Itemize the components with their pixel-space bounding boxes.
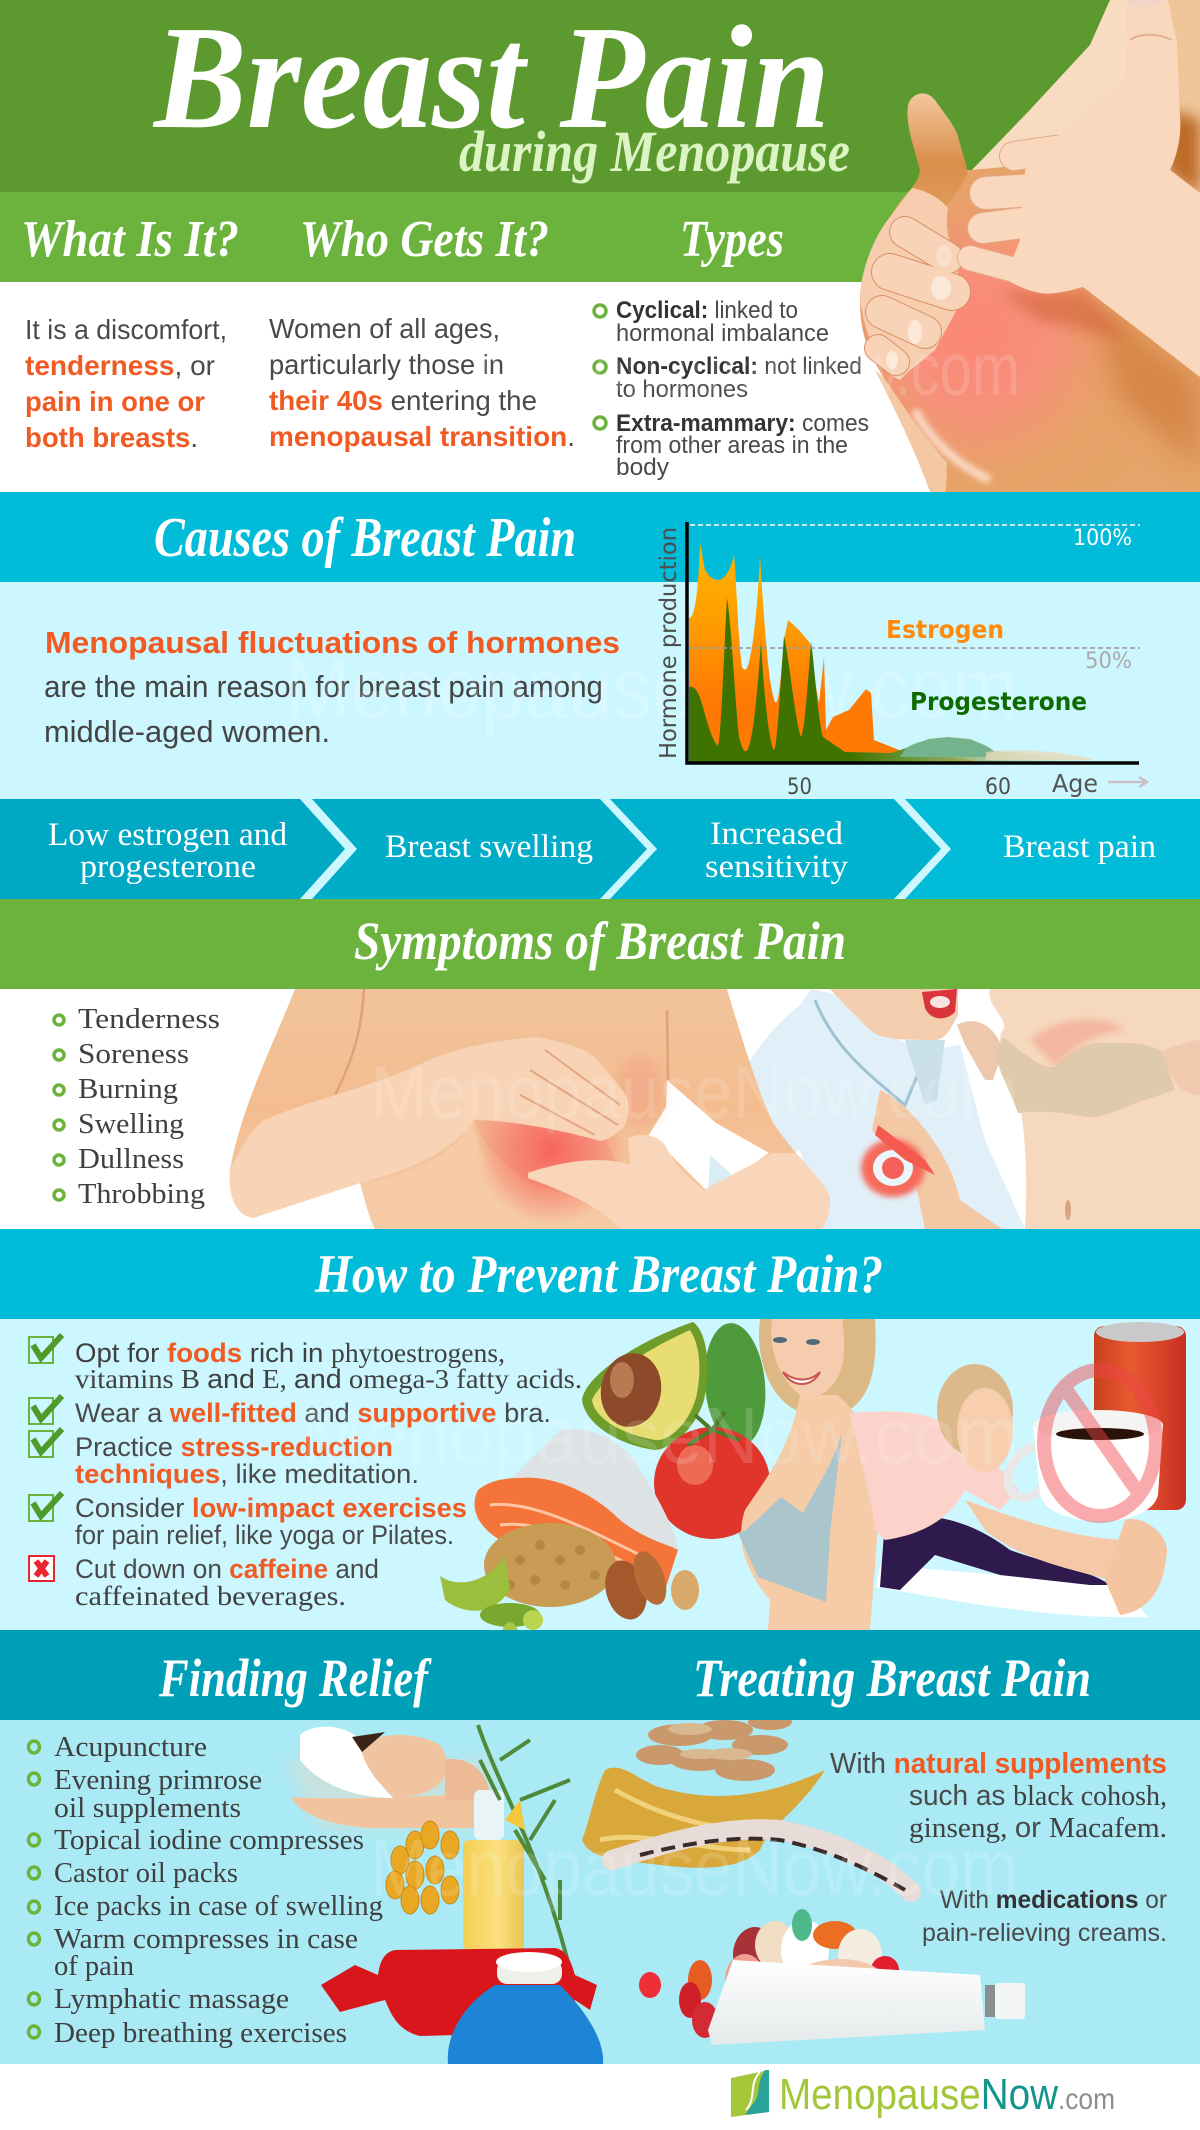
photo: woman stretching yoga: [850, 1364, 1167, 1617]
list: prevention tips: vitamins B and E, and omega-3 fatty acids.: [75, 1364, 582, 1394]
list: types: hormonal imbalance: [616, 320, 829, 347]
chart: hormone production by age: 50%: [1085, 649, 1132, 674]
heading: finding relief: Finding Relief: [158, 1648, 432, 1708]
panel: header band: [0, 0, 1200, 492]
list: relief methods: Topical iodine compresses: [54, 1825, 364, 1856]
text block: treating options: [830, 1748, 1167, 1947]
list: symptoms: Tenderness: [78, 1004, 220, 1035]
photo: supplements and ginseng: [582, 1714, 911, 1892]
list: relief methods: Warm compresses in case: [54, 1924, 358, 1955]
heading: treating: Treating Breast Pain: [693, 1648, 1091, 1708]
list: relief methods: Castor oil packs: [54, 1858, 238, 1889]
panel: symptoms heading band: [0, 899, 1200, 989]
panel: how to prevent breast pain: [0, 1229, 1200, 1630]
text block: who gets it: menopausal transition.: [269, 421, 575, 452]
text block: causes: Menopausal fluctuations of hormones: [45, 625, 620, 660]
panel: causes of breast pain: [0, 492, 1200, 799]
list: types: Cyclical: linked to: [616, 297, 798, 324]
text block: treating options: With natural supplements: [830, 1748, 1167, 1780]
list: prevention tips: for pain relief, like yoga or Pilates.: [75, 1520, 454, 1550]
estrogen area: [689, 543, 983, 762]
text block: who gets it: Women of all ages,: [269, 313, 500, 344]
flow arrows: hormone decline to pain: sensitivity: [705, 849, 849, 885]
photo: woman in shirt holding chest: [750, 989, 1025, 1229]
list: symptoms: Soreness: [78, 1039, 189, 1070]
list: types: Extra-mammary: comes: [616, 410, 869, 437]
photo: torso with hands on breast: [230, 989, 830, 1229]
photo: smiling woman in sports top: [738, 1319, 880, 1630]
photo: hot water bottle and ice bag: [321, 1948, 603, 2064]
chart: hormone production by age: 50: [787, 775, 812, 800]
photo: healthy foods: [440, 1321, 770, 1658]
list: symptoms: Throbbing: [78, 1179, 205, 1210]
list: types: [594, 297, 869, 481]
text block: what is it: It is a discomfort,: [25, 314, 227, 345]
chart: hormone production by age: [656, 522, 1147, 800]
flow arrows: hormone decline to pain: [0, 799, 1200, 899]
flow arrows: hormone decline to pain: Low estrogen and: [48, 817, 287, 853]
list: prevention tips: [29, 1335, 582, 1611]
chart: hormone production by age: Age: [1052, 769, 1098, 798]
list: prevention tips: techniques, like meditation.: [75, 1459, 419, 1489]
text block: causes: are the main reason for breast pain among: [44, 669, 603, 704]
list: symptoms: Dullness: [78, 1144, 184, 1175]
infographic: breast pain during menopause: MenopauseNow.com: [370, 1823, 1018, 1912]
list: relief methods: [28, 1732, 383, 2049]
list: relief methods: Ice packs in case of swelling: [54, 1891, 383, 1922]
chart: hormone production by age: Estrogen: [886, 615, 1004, 644]
text block: who gets it: [269, 313, 575, 452]
infographic: breast pain during menopause: MenopauseNow.com: [285, 641, 1018, 737]
list: symptoms: Swelling: [78, 1109, 184, 1140]
photo: woman in bra: [957, 989, 1200, 1229]
text block: causes: [44, 625, 620, 749]
list: relief methods: Evening primrose: [54, 1765, 262, 1796]
text block: what is it: pain in one or: [25, 386, 205, 417]
chart: hormone production by age: 60: [985, 775, 1011, 800]
flow arrows: hormone decline to pain: Breast pain: [1003, 829, 1156, 865]
heading: causes: Causes of Breast Pain: [154, 507, 576, 569]
heading: types: Types: [680, 211, 784, 268]
list: prevention tips: Consider low-impact exercises: [75, 1493, 467, 1523]
heading: who gets it: Who Gets It?: [300, 211, 549, 268]
list: symptoms: Burning: [78, 1074, 178, 1105]
title: Breast Pain: [152, 0, 830, 160]
text block: treating options: such as black cohosh,: [909, 1780, 1167, 1812]
chart: hormone production by age: Hormone production: [656, 527, 682, 759]
list: relief methods: Deep breathing exercises: [54, 2018, 347, 2049]
text block: what is it: tenderness, or: [25, 350, 215, 381]
flow arrows: hormone decline to pain: progesterone: [80, 849, 256, 885]
infographic: breast pain during menopause: MenopauseNow.com: [300, 1391, 1020, 1480]
list: prevention tips: Cut down on caffeine and: [75, 1554, 379, 1584]
chart: hormone production by age: Progesterone: [910, 687, 1087, 716]
subtitle: during Menopause: [459, 119, 850, 184]
heading: symptoms: Symptoms of Breast Pain: [354, 911, 846, 971]
list: relief methods: of pain: [54, 1951, 134, 1982]
axes: [687, 522, 1139, 763]
list: symptoms: [54, 1004, 220, 1210]
list: types: from other areas in the: [616, 432, 848, 459]
list: types: body: [616, 454, 669, 481]
progesterone area: [689, 598, 1094, 762]
text block: what is it: [25, 314, 227, 453]
text block: what is it: both breasts.: [25, 422, 198, 453]
list: relief methods: Lymphatic massage: [54, 1984, 289, 2015]
photo: pills and cream tube: [639, 1909, 1025, 2045]
chart: hormone production by age: 100%: [1073, 526, 1132, 551]
text block: treating options: ginseng, or Macafem.: [909, 1812, 1167, 1844]
photo: oil bottle and plant: [386, 1725, 570, 1970]
flow arrows: hormone decline to pain: Breast swelling: [385, 829, 593, 865]
text block: treating options: pain-relieving creams.: [922, 1919, 1167, 1947]
logo: MenopauseNow.com: MenopauseNow.com: [779, 2070, 1115, 2119]
text block: who gets it: particularly those in: [269, 349, 504, 380]
list: relief methods: Acupuncture: [54, 1732, 207, 1763]
text block: treating options: With medications or: [940, 1886, 1167, 1914]
panel: finding relief and treating: [0, 1630, 1200, 2064]
infographic: breast pain during menopause: MenopauseNow.com: [480, 328, 1020, 411]
icon: no caffeine: [1008, 1322, 1186, 1521]
list: types: Non-cyclical: not linked: [616, 353, 862, 380]
infographic: breast pain during menopause: MenopauseNow.com: [370, 1051, 1018, 1134]
text block: who gets it: their 40s entering the: [269, 385, 537, 416]
list: prevention tips: Wear a well-fitted and supportive bra.: [75, 1398, 551, 1428]
list: prevention tips: caffeinated beverages.: [75, 1581, 346, 1611]
heading: prevent: How to Prevent Breast Pain?: [314, 1244, 883, 1304]
heading: what is it: What Is It?: [21, 211, 239, 268]
list: prevention tips: Practice stress-reduction: [75, 1432, 393, 1462]
photo: relaxing woman with towel: [285, 1727, 490, 1828]
text block: causes: middle-aged women.: [44, 714, 330, 749]
photo: hands holding breast: [860, 0, 1200, 492]
list: types: to hormones: [616, 376, 748, 403]
list: prevention tips: Opt for foods rich in phytoestrogens,: [75, 1338, 505, 1368]
list: relief methods: oil supplements: [54, 1793, 241, 1824]
flow arrows: hormone decline to pain: Increased: [710, 816, 844, 852]
